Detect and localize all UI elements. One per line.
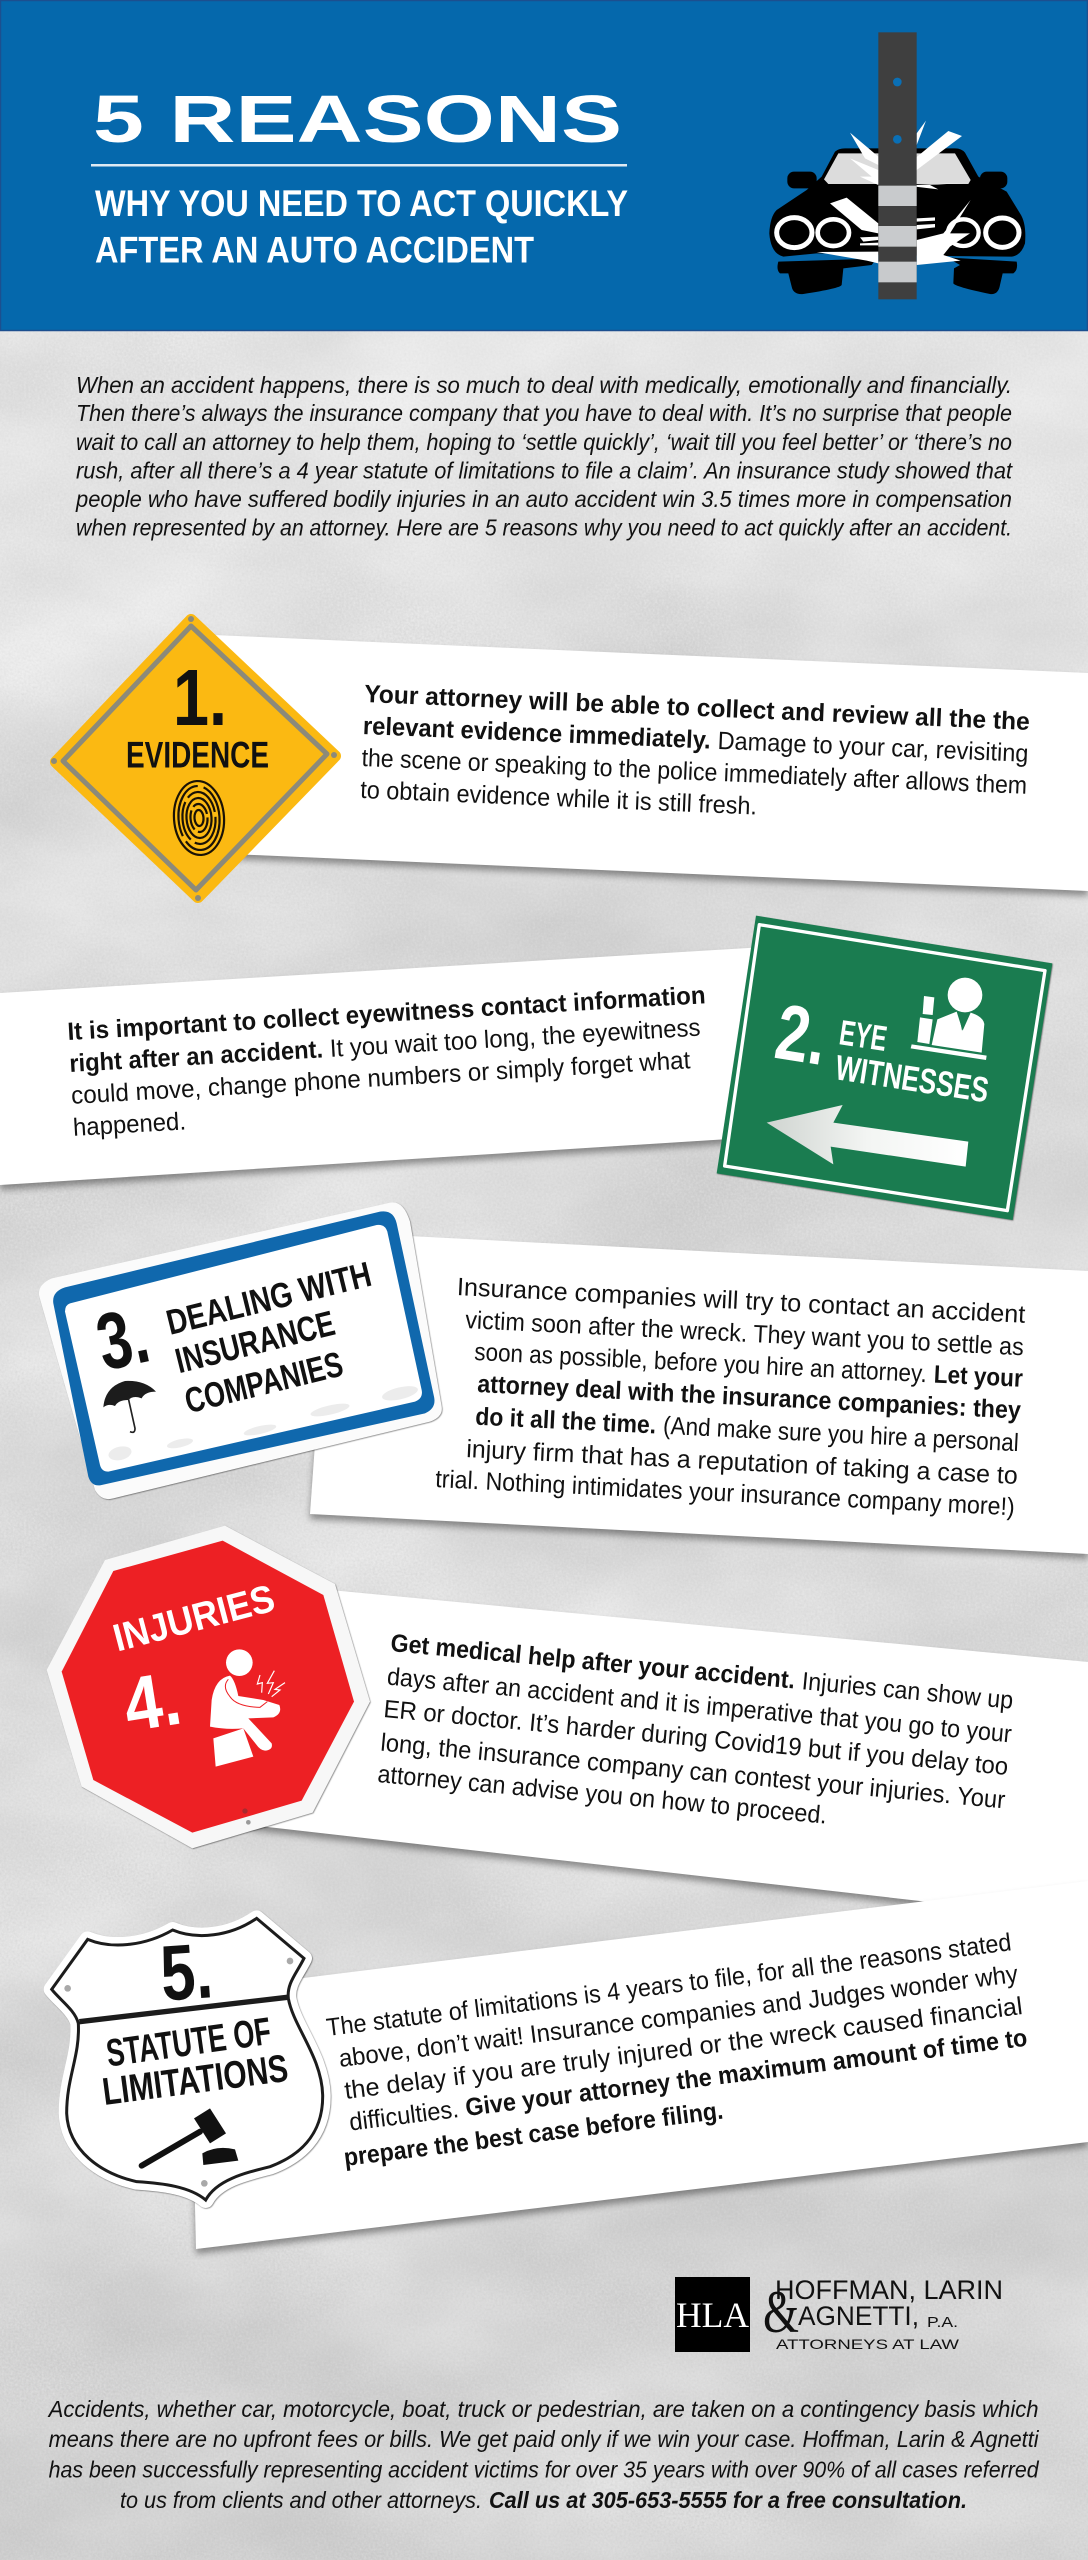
panel 3 text: trial. Nothing intimidates your insurance company more!) — [435, 1465, 1015, 1521]
icon: car crashed into a pole — [769, 32, 1025, 299]
sign 5 label: STATUTE OF — [104, 2010, 274, 2076]
arrow pointing left — [767, 1105, 968, 1167]
panel 2 text: It is important to collect eyewitness contact information — [67, 981, 706, 1046]
intro paragraph: people who have suffered bodily injuries in an auto accident win 3.5 times more in compensation — [75, 486, 1012, 512]
icon: injured person — [210, 1649, 285, 1767]
panel 2 text — [67, 981, 712, 1142]
intro paragraph: wait to call an attorney to help them, hoping to ‘settle quickly’, ‘wait till you feel better’ or ‘there’s no — [76, 429, 1012, 455]
panel 3 text: attorney deal with the insurance companies: they — [477, 1370, 1022, 1425]
panel 5 text: prepare the best case before filing. — [342, 2097, 725, 2172]
panel 3 text: Let your — [933, 1360, 1024, 1393]
sign 5 label: LIMITATIONS — [100, 2047, 291, 2114]
panel 4 text: attorney can advise you on how to proceed. — [376, 1760, 828, 1830]
panel 5 text: The statute of limitations is 4 years to file, for all the reasons stated — [325, 1928, 1013, 2042]
sign 4: red octagon — [47, 1526, 370, 1848]
logo mark: HLA — [676, 2295, 749, 2335]
panel 2 text: It you wait too long, the eyewitness — [329, 1014, 701, 1063]
panel 1 text: to obtain evidence while it is still fresh. — [360, 776, 758, 821]
logo wordmark: & — [763, 2279, 799, 2345]
panel 5 text: Give your attorney the maximum amount of time to — [464, 2024, 1029, 2122]
sign 5 number: 5. — [158, 1926, 215, 2018]
logo wordmark: AGNETTI, — [798, 2301, 919, 2331]
sign 2 label: EYE — [837, 1013, 889, 1059]
panel 4 text: days after an accident and it is imperative that you go to your — [386, 1663, 1013, 1748]
panel 2 text: could move, change phone numbers or simply forget what — [70, 1046, 691, 1110]
icon: umbrella — [103, 1381, 156, 1432]
panel 4 text: ER or doctor. It’s harder during Covid19 but if you delay too — [382, 1695, 1009, 1781]
panel 3 text: (And make sure you hire a personal — [662, 1412, 1019, 1457]
panel 1: evidence — [51, 616, 1088, 901]
panel 5 text — [325, 1928, 1029, 2172]
title: 5 Reasons: 5 REASONS — [93, 82, 622, 157]
panel 5 text: above, don’t wait! Insurance companies and Judges wonder why — [337, 1960, 1020, 2073]
logo wordmark: ATTORNEYS AT LAW — [776, 2336, 960, 2352]
panel 4 text: Injuries can show up — [801, 1667, 1014, 1715]
panel 1 text: Your attorney will be able to collect and review all the the — [364, 680, 1030, 736]
firm logo — [675, 2275, 1003, 2352]
panel 3 text: soon as possible, before you hire an attorney. — [474, 1338, 928, 1388]
intro paragraph: rush, after all there’s a 4 year statute of limitations to file a claim’. An insurance study showed that — [76, 458, 1013, 484]
logo wordmark — [763, 2275, 1003, 2352]
sign 1 label: EVIDENCE — [126, 734, 269, 776]
closing paragraph: Accidents, whether car, motorcycle, boat, truck or pedestrian, are taken on a contingency basis which — [47, 2396, 1039, 2422]
subtitle: AFTER AN AUTO ACCIDENT — [95, 230, 534, 270]
sign 2 number: 2. — [770, 987, 833, 1082]
icon: gavel — [142, 2108, 238, 2166]
sign 4 label: INJURIES — [109, 1577, 279, 1660]
sign 1 number: 1. — [173, 653, 227, 742]
closing paragraph: to us from clients and other attorneys. — [120, 2487, 482, 2513]
panel 2 text: right after an accident. — [69, 1035, 324, 1078]
panel 2: eye witnesses — [0, 916, 1052, 1220]
sign 3 label: DEALING WITH — [163, 1255, 375, 1343]
panel 3: dealing with insurance companies — [39, 1202, 1088, 1554]
sign 5 label — [100, 2010, 291, 2114]
sign 2 label: WITNESSES — [833, 1048, 991, 1110]
sign 3: blue-bordered white sign — [39, 1202, 442, 1499]
title divider — [91, 164, 627, 166]
panel 3 text — [435, 1273, 1026, 1521]
panel 4 text: Get medical help after your accident. — [389, 1629, 796, 1694]
panel 1 text — [360, 680, 1030, 832]
panel 3 text: Insurance companies will try to contact an accident — [456, 1273, 1026, 1329]
panel 5 text: the delay if you are truly injured or the wreck caused financial — [343, 1992, 1024, 2105]
panel 5: statute of limitations — [52, 1881, 1088, 2249]
sign 3 number: 3. — [89, 1290, 156, 1387]
panel 4 text — [376, 1629, 1014, 1830]
closing paragraph: means there are no upfront fees or bills. We get paid only if we win your case. Hoffman, Larin & Agnetti — [49, 2426, 1039, 2452]
icon: witness at a stand — [911, 978, 987, 1060]
sign 4 number: 4. — [118, 1656, 187, 1748]
panel 1 text: the scene or speaking to the police immediately after allows them — [361, 744, 1028, 800]
panel 1 text: Damage to your car, revisiting — [717, 727, 1029, 768]
intro paragraph: Then there’s always the insurance company that you have to deal with. It’s no surprise that people — [76, 400, 1012, 426]
intro paragraph: when represented by an attorney. Here are 5 reasons why you need to act quickly after an accident. — [76, 514, 1012, 540]
panel 4 text: long, the insurance company can contest your injuries. Your — [379, 1729, 1006, 1814]
subtitle: WHY YOU NEED TO ACT QUICKLY — [95, 183, 628, 224]
closing paragraph: Call us at 305-653-5555 for a free consultation. — [489, 2487, 967, 2513]
sign 5: highway shield — [52, 1918, 323, 2200]
sign 2 label — [833, 1013, 991, 1110]
subtitle — [95, 183, 628, 270]
logo mark — [675, 2277, 750, 2352]
intro paragraph — [75, 372, 1013, 540]
panel 3 text: victim soon after the wreck. They want you to settle as — [465, 1306, 1024, 1361]
intro paragraph: When an accident happens, there is so much to deal with medically, emotionally and financially. — [76, 372, 1012, 398]
panel 1 text: relevant evidence immediately. — [362, 712, 711, 755]
panel 4: injuries — [47, 1526, 1088, 1920]
panel 2 text: happened. — [72, 1107, 187, 1142]
sign 3 label: COMPANIES — [181, 1345, 347, 1421]
closing paragraph — [47, 2396, 1039, 2513]
logo wordmark: P.A. — [927, 2314, 958, 2331]
sign 3 label — [163, 1255, 375, 1421]
logo wordmark: HOFFMAN, LARIN — [775, 2275, 1003, 2305]
sign 1: yellow diamond — [51, 616, 337, 901]
sign 3 label: INSURANCE — [171, 1304, 339, 1381]
header banner — [0, 0, 1088, 330]
icon: fingerprint — [171, 779, 227, 857]
sign 2: green direction sign — [717, 916, 1052, 1220]
panel 3 text: do it all the time. — [475, 1403, 657, 1439]
panel 3 text: injury firm that has a reputation of taking a case to — [466, 1435, 1018, 1490]
panel 5 text: difficulties. — [348, 2095, 460, 2137]
